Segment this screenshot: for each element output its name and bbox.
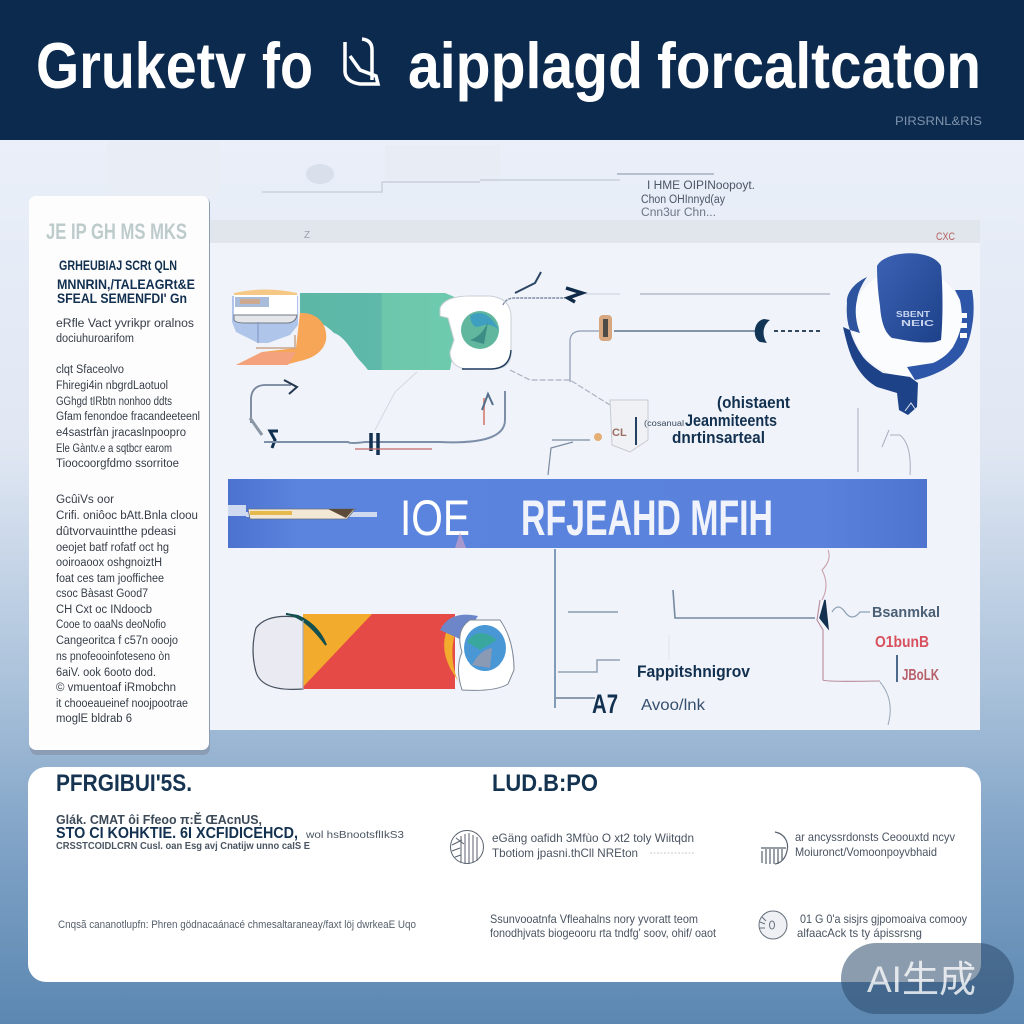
title bbox=[36, 29, 981, 102]
sidebar paragraph two: dûtvorvauintthe pdeasi bbox=[56, 526, 176, 538]
banner subtitle: PIRSRNL&RIS bbox=[895, 114, 982, 128]
sidebar paragraph two bbox=[56, 494, 198, 725]
label: step one: Fappitshnigrov bbox=[637, 662, 750, 681]
sidebar paragraph two: 6aiV. ook 6ooto dod. bbox=[56, 667, 156, 679]
panel: main diagram: Z bbox=[304, 230, 310, 241]
sidebar paragraph one: Fhiregi4in nbgrdLaotuol bbox=[56, 380, 168, 392]
callout: small node label: CL bbox=[612, 427, 627, 439]
legend: right labels bbox=[820, 600, 940, 684]
sidebar paragraph two: Cooe to oaaNs deoNofio bbox=[56, 619, 166, 631]
sidebar bold heading: GRHEUBIAJ SCRt QLN bbox=[59, 257, 177, 273]
legend: right labels: Bsanmkal bbox=[872, 604, 940, 621]
title banner bbox=[0, 0, 1024, 140]
arrow: left loop bbox=[250, 372, 505, 455]
bottom left text: Glák. CMAT ôi Ffeoo π:Ě ŒAcnUS, bbox=[56, 812, 262, 827]
sidebar paragraph two: © vmuentoaf iRmobchn bbox=[56, 682, 176, 694]
arrow: lens to top connector bbox=[503, 272, 620, 305]
text: item three: Ssunvooatnfa Vfleahalns nory yvoratt teom bbox=[490, 912, 698, 926]
text block: centre heading bbox=[644, 393, 790, 447]
bottom left heading: PFRGIBUI'5S. bbox=[56, 770, 192, 797]
small fragments right bbox=[858, 408, 910, 475]
text block: centre heading: (cosanual bbox=[644, 419, 684, 428]
sidebar paragraph two: Cangeoritca f c57n ooojo bbox=[56, 635, 178, 647]
sidebar paragraph one: Ele Gàntv.e a sqtbcr earom bbox=[56, 443, 172, 455]
marker and line: centre bbox=[570, 315, 820, 382]
panel: left sidebar bbox=[29, 196, 210, 755]
sidebar paragraph two: csoc Bàsast Good7 bbox=[56, 588, 148, 600]
bottom right heading: LUD.B:PO bbox=[492, 770, 598, 797]
sidebar faint heading: JE IP GH MS MKS bbox=[46, 219, 187, 244]
text: item one: Tbotiom jpasni.thCll NREton bbox=[492, 846, 638, 860]
title: aipplagd bbox=[408, 29, 643, 102]
text block: centre heading: Jeanmiteents bbox=[685, 411, 777, 430]
banner: blue section heading: RFJEAHD MFIH bbox=[521, 490, 773, 546]
bottom left text: Cnqsã cananotlupfn: Phren gödnacaánacé chmesaltaraneay/faxt löj dwrkeaE Uqo bbox=[58, 919, 416, 931]
card shield bbox=[232, 296, 298, 343]
text: item two: ar ancyssrdonsts Ceoouxtd ncyv bbox=[795, 830, 955, 844]
lens bbox=[440, 296, 511, 369]
text: item one bbox=[492, 831, 694, 860]
badge: AI generated: AI生成 bbox=[867, 959, 976, 1000]
text: item four: alfaacAck ts ty ápissrsng bbox=[797, 926, 922, 940]
upper faint legend: Chon OHInnyd(ay bbox=[641, 194, 725, 206]
icon: pen bbox=[228, 505, 377, 517]
sidebar paragraph one: Tioocoorgfdmo ssorritoe bbox=[56, 458, 179, 470]
bottom left text: CRSSTCOIDLCRN Cusl. oan Esg avj Cnatijw unno caIS E bbox=[56, 841, 310, 852]
sidebar paragraph one: clqt Sfaceolvo bbox=[56, 364, 124, 376]
text: item one: eGäng oafidh 3Mfùo O xt2 toly Wiitqdn bbox=[492, 831, 694, 845]
bottom left text bbox=[56, 812, 416, 931]
upper faint legend bbox=[107, 141, 755, 219]
sidebar paragraph two: GcûiVs oor bbox=[56, 494, 114, 506]
text: item two: Moiuronct/Vomoonpoyvbhaid bbox=[795, 845, 937, 859]
text: item three: fonodhjvats biogeooru rta tndfg' soov, ohif/ oaot bbox=[490, 926, 717, 940]
connector: lower dashed bbox=[510, 370, 610, 405]
upper faint legend: I HME OIPINoopoyt. bbox=[647, 180, 755, 192]
sidebar paragraph one: Gfam fenondoe fracandeeteenl bbox=[56, 411, 200, 423]
icon: disc bbox=[759, 911, 787, 939]
sidebar intro text: dociuhuroarifom bbox=[56, 333, 134, 345]
text: item four: 01 G 0'a sisjrs gjpomoaiva comooy bbox=[800, 912, 967, 926]
text: item four bbox=[797, 912, 967, 940]
sidebar paragraph two: oeojet batf rofatf oct hg bbox=[56, 542, 169, 554]
timeline: vertical axis and steps bbox=[555, 549, 890, 725]
connector line: top bbox=[640, 293, 830, 295]
icon: blue shield badge bbox=[843, 253, 974, 415]
bottom left text: wol hsBnootsflIkS3 bbox=[305, 830, 404, 841]
legend: right labels: JBoLK bbox=[902, 667, 939, 684]
title: Gruketv bbox=[36, 29, 246, 102]
sidebar paragraph one: e4sastrfàn jracaslnpoopro bbox=[56, 427, 186, 439]
sidebar paragraph two: moglE bldrab 6 bbox=[56, 713, 132, 725]
sidebar paragraph two: CH Cxt oc INdoocb bbox=[56, 604, 152, 616]
bottom left text: STO CI KOHKTIE. 6I XCFIDICEHCD, bbox=[56, 825, 298, 842]
sidebar paragraph one: GGhgd tIRbtn nonhoo ddts bbox=[56, 396, 172, 408]
sidebar paragraph two: ooiroaoox oshgnoiztH bbox=[56, 557, 162, 569]
label: step two: Avoo/lnk bbox=[641, 697, 706, 714]
banner text: IOE bbox=[400, 490, 470, 546]
sidebar paragraph two: foat ces tam jooffichee bbox=[56, 573, 164, 585]
sidebar bold heading: SFEAL SEMENFDI' Gn bbox=[57, 290, 187, 306]
title: forcaltcaton bbox=[657, 29, 981, 102]
panel: bottom summary bbox=[28, 767, 981, 982]
label: step two: A7 bbox=[592, 689, 618, 719]
sidebar intro text bbox=[56, 318, 194, 345]
upper faint legend: Cnn3ur Chn... bbox=[641, 207, 716, 219]
sidebar bold heading bbox=[57, 257, 195, 306]
sidebar paragraph one bbox=[56, 364, 200, 470]
icon: striped circle bbox=[450, 830, 484, 864]
lens bbox=[444, 625, 461, 686]
icon: green process block bbox=[232, 290, 511, 370]
text: item two bbox=[795, 830, 955, 859]
badge: AI generated bbox=[841, 943, 1014, 1014]
sidebar paragraph two: ns pnofeooinfoteseno òn bbox=[56, 651, 170, 663]
label: step two bbox=[592, 689, 706, 719]
header mark: CXC bbox=[936, 231, 955, 243]
sidebar intro text: eRfle Vact yvrikpr oralnos bbox=[56, 318, 194, 330]
icon: red process block bbox=[253, 614, 514, 690]
sidebar bold heading: MNNRIN,/TALEAGRt&E bbox=[57, 276, 195, 292]
icon: half striped circle bbox=[761, 832, 788, 864]
badge label: SBENT bbox=[896, 310, 930, 319]
callout: small node label bbox=[548, 400, 648, 475]
legend: right labels: O1bunB bbox=[875, 634, 929, 651]
banner: blue section heading bbox=[228, 479, 927, 548]
text: item three bbox=[490, 912, 717, 940]
sidebar paragraph two: Crifi. oniôoc bAtt.Bnla cloou bbox=[56, 510, 198, 522]
sidebar paragraph two: it chooeaueinef noojpootrae bbox=[56, 698, 188, 710]
panel: main diagram bbox=[210, 220, 980, 730]
text block: centre heading: dnrtinsarteal bbox=[672, 428, 765, 447]
title: fo bbox=[262, 29, 313, 102]
text block: centre heading: (ohistaent bbox=[717, 393, 790, 412]
orange swoosh bbox=[236, 313, 326, 365]
icon: blue shield badge: NEIC bbox=[901, 319, 934, 328]
